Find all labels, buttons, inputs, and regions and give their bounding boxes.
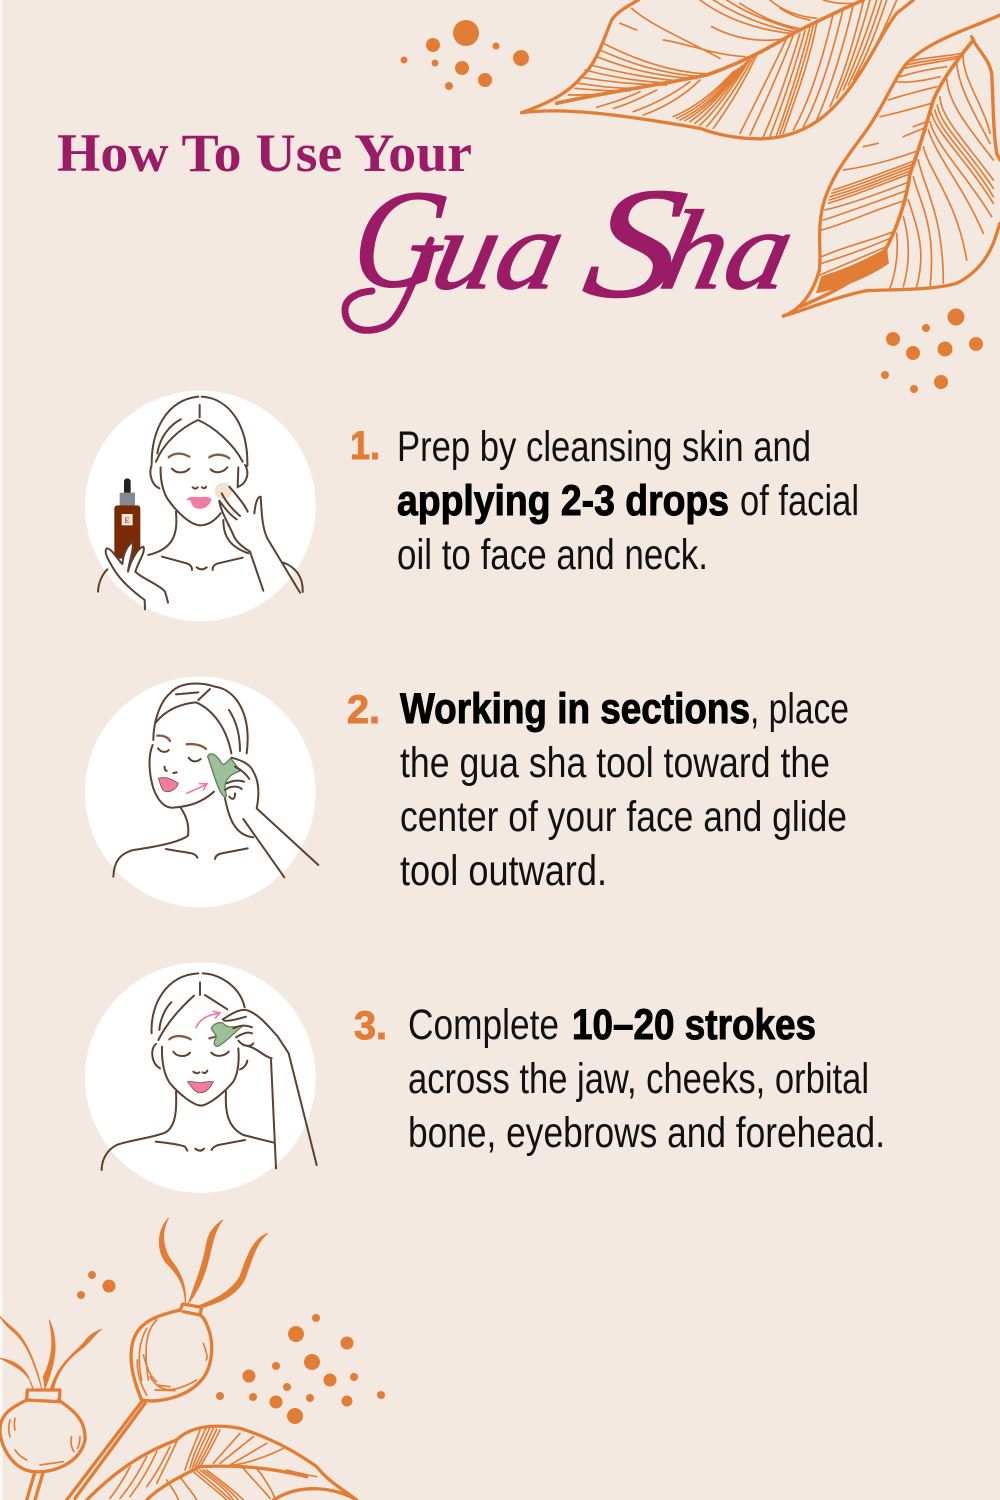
title: Gua Sha script: ha [652, 187, 804, 313]
pink arrow [187, 784, 207, 793]
oil bottle: E [125, 515, 130, 525]
title: How To Use Your: How To Use Your [57, 123, 472, 183]
decoration: rose hip, right [67, 1218, 268, 1500]
left hand [106, 542, 168, 609]
hand [223, 1010, 317, 1168]
text: step 3: 10–20 strokes [572, 1001, 816, 1049]
text: step 3 [354, 1001, 885, 1157]
lips [158, 778, 178, 792]
decoration: top leaf [522, 0, 913, 139]
title: Gua Sha script: G [347, 162, 455, 317]
text: step 1: Prep by cleansing skin and [397, 423, 811, 471]
panel: step 1 illustration [85, 391, 316, 621]
decoration: small dots beside hip [77, 1271, 116, 1299]
text: step 1: applying 2-3 drops [397, 477, 729, 525]
lips [186, 497, 212, 509]
white circle [85, 677, 316, 907]
decoration: rose hip, left [0, 1317, 102, 1500]
lips [187, 1081, 213, 1093]
text: step 3: 3. [354, 1004, 387, 1048]
hand [225, 758, 318, 877]
decoration: right dots [881, 308, 983, 393]
text: step 1: 1. [350, 424, 380, 468]
gua sha tool [211, 1023, 243, 1046]
text: step 2: 2. [347, 688, 380, 732]
decoration: right leaf [783, 15, 1000, 316]
decoration: bottom dots [216, 1314, 385, 1424]
text: step 2: the gua sha tool toward the [400, 739, 830, 787]
title: Gua Sha script: ua [423, 187, 575, 313]
cotton pad [215, 482, 232, 500]
decoration: bottom leaf [87, 1426, 357, 1500]
title: Gua Sha script: S [574, 156, 697, 331]
white circle [85, 962, 316, 1193]
text: step 1: of facial [740, 477, 859, 525]
text: step 2: , place [750, 685, 849, 733]
text: step 2: tool outward. [400, 847, 607, 895]
text: step 2: Working in sections [400, 685, 750, 733]
face with hair [98, 397, 303, 592]
oil bottle [114, 478, 140, 559]
pink arrow [196, 1011, 220, 1028]
panel: step 3 illustration [85, 962, 317, 1193]
text: step 3: bone, eyebrows and forehead. [408, 1109, 885, 1157]
text: step 1 [350, 423, 859, 579]
white circle [85, 391, 316, 621]
text: step 2: center of your face and glide [400, 793, 847, 841]
text: step 3: Complete [408, 1001, 559, 1049]
face with hair [102, 973, 274, 1170]
title: Gua Sha script [345, 156, 804, 331]
text: step 1: oil to face and neck. [397, 531, 708, 579]
gua sha tool [208, 754, 240, 797]
right hand [219, 487, 300, 593]
text: step 2 [347, 685, 849, 895]
text: step 3: across the jaw, cheeks, orbital [408, 1055, 869, 1103]
face with hair [113, 683, 253, 877]
decoration: top dots [400, 20, 529, 90]
panel: step 2 illustration [85, 677, 318, 907]
